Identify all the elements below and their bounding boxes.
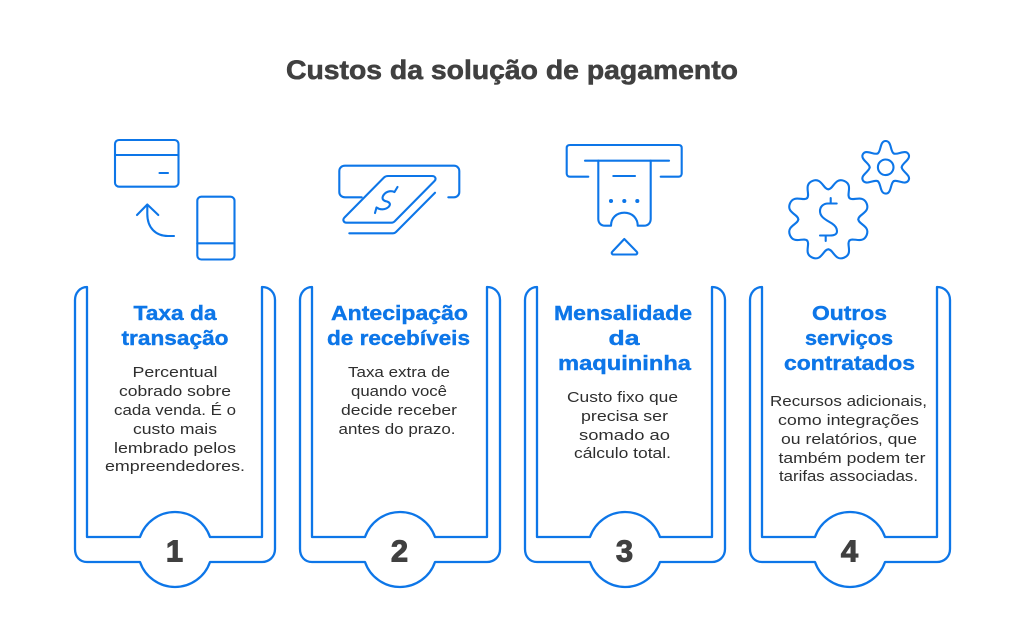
body 1: empreendedores. xyxy=(105,458,245,475)
panel 3: mensalidade da maquininha xyxy=(525,287,725,587)
heading 3: maquininha xyxy=(558,353,692,375)
body 1: cobrado sobre xyxy=(119,383,231,400)
heading 1: Taxa da xyxy=(134,303,217,325)
number 2: 2 xyxy=(391,534,408,568)
body 4: ou relatórios, que xyxy=(781,431,917,448)
number 3: 3 xyxy=(616,534,633,568)
icon: card and phone xyxy=(115,140,234,260)
body 3: somado ao xyxy=(579,427,670,444)
body 1: Percentual xyxy=(132,364,218,381)
panel 1: taxa da transação xyxy=(75,287,275,587)
body 2 xyxy=(338,364,457,438)
heading 4: serviços xyxy=(805,328,893,350)
number 1: 1 xyxy=(166,534,183,568)
heading 4: contratados xyxy=(784,353,915,375)
body 2: quando você xyxy=(351,383,447,400)
body 3: cálculo total. xyxy=(574,445,671,462)
title: Custos da solução de pagamento xyxy=(286,55,738,85)
body 1: custo mais xyxy=(133,421,217,438)
heading 4: Outros xyxy=(812,303,887,325)
heading 2 xyxy=(327,303,470,350)
body 2: antes do prazo. xyxy=(338,421,456,438)
heading 1 xyxy=(122,303,228,350)
heading 3 xyxy=(554,303,692,375)
body 1 xyxy=(105,364,245,475)
icon: gears with dollar xyxy=(786,141,912,262)
heading 3: da xyxy=(608,328,641,350)
heading 4 xyxy=(784,303,915,375)
panel 2: antecipação de recebíveis xyxy=(300,287,500,587)
body 3: Custo fixo que xyxy=(567,389,678,406)
body 3 xyxy=(567,389,678,462)
body 4: também podem ter xyxy=(778,450,926,467)
number 4: 4 xyxy=(841,534,859,568)
body 1: lembrado pelos xyxy=(114,440,236,457)
body 4: Recursos adicionais, xyxy=(770,393,927,410)
body 4 xyxy=(770,393,927,485)
body 1: cada venda. É o xyxy=(114,402,236,419)
body 4: tarifas associadas. xyxy=(779,468,918,485)
panel 4: outros serviços contratados xyxy=(750,287,950,587)
body 2: decide receber xyxy=(341,402,457,419)
heading 2: Antecipação xyxy=(331,303,468,325)
heading 1: transação xyxy=(122,328,228,350)
icon: receipt from terminal xyxy=(567,145,682,254)
heading 2: de recebíveis xyxy=(327,328,470,350)
body 3: precisa ser xyxy=(581,408,668,425)
heading 3: Mensalidade xyxy=(554,303,692,325)
body 2: Taxa extra de xyxy=(348,364,450,381)
icon: bill leaving slot xyxy=(339,166,459,233)
body 4: como integrações xyxy=(778,412,919,429)
